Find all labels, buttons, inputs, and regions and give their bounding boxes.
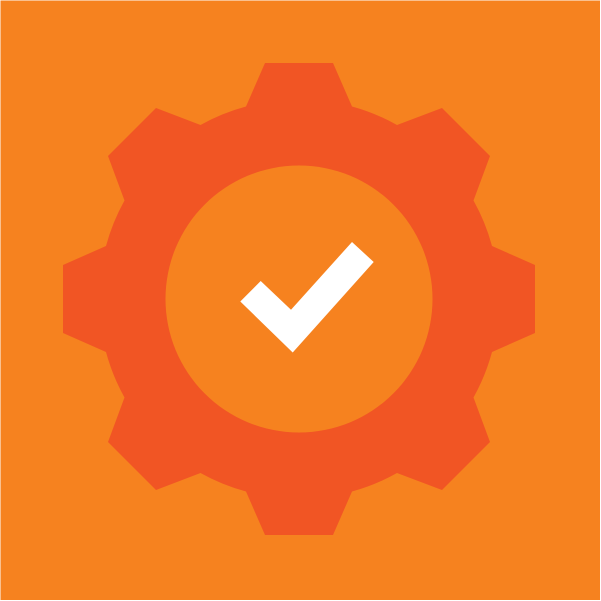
gear centre circle (166, 166, 432, 432)
icon: white check mark (240, 242, 374, 352)
icon: gear (63, 63, 535, 535)
